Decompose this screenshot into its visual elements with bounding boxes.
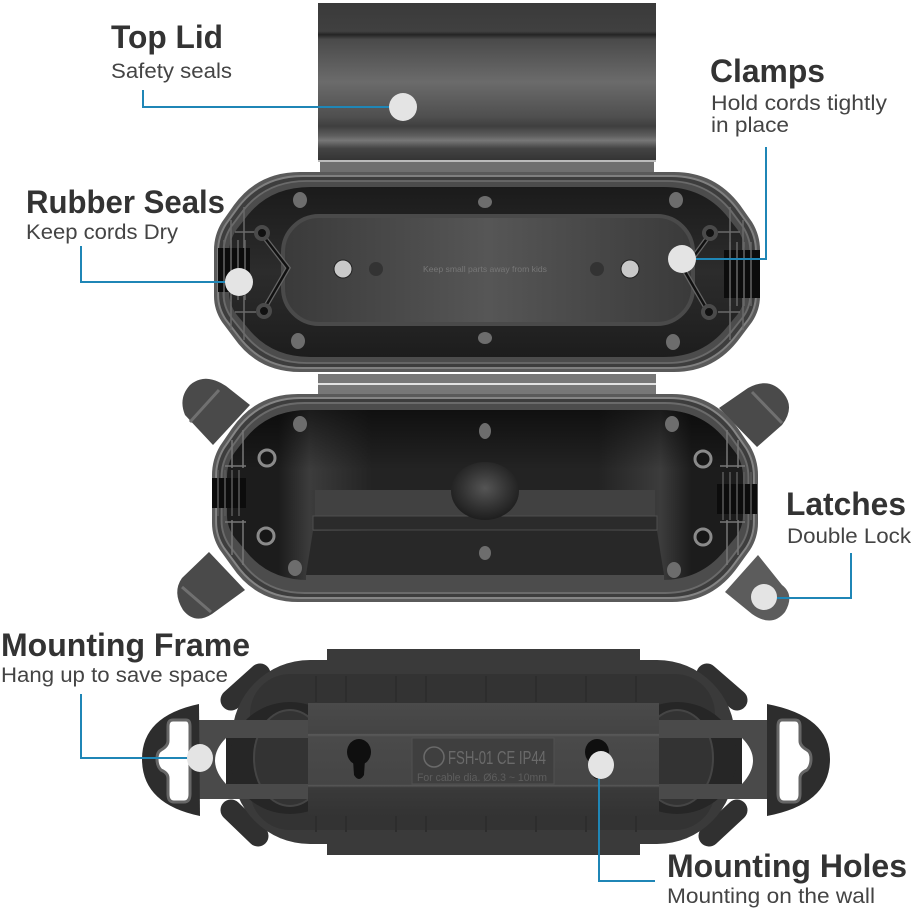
product: upper case interior (214, 172, 760, 372)
clamps (256, 227, 716, 318)
product: open top lid (318, 3, 656, 180)
centre plate (308, 703, 659, 816)
seal housing lines upper (231, 207, 743, 340)
keyhole right (585, 739, 609, 779)
marker: mounting frame (187, 744, 213, 772)
marker: clamps (668, 245, 696, 273)
leader: clamps (694, 147, 766, 259)
leader: latches (776, 553, 851, 598)
callout: mounting holes (667, 848, 907, 908)
callout: rubber seals: Keep cords Dry (26, 221, 179, 244)
callout: clamps (710, 53, 888, 137)
marker: mounting holes (588, 751, 614, 779)
corner latches (231, 674, 737, 836)
callout: rubber seals: Rubber Seals (26, 184, 225, 220)
seal housing lines lower (225, 430, 745, 565)
product: lower case interior (212, 394, 758, 602)
rubber seals lower (212, 470, 757, 520)
drum ends (226, 738, 256, 784)
mounting bosses (258, 450, 711, 545)
marker: latches (751, 584, 777, 610)
marker: rubber seals (225, 268, 253, 296)
rubber seals upper (218, 240, 760, 306)
callout: clamps: in place (711, 114, 789, 137)
hinge strip (318, 374, 656, 398)
callout: latches: Latches (786, 486, 906, 522)
rating label (412, 738, 554, 784)
centre dome (451, 462, 519, 520)
callout: mounting holes: Mounting Holes (667, 848, 907, 884)
callout: top lid: Top Lid (111, 19, 223, 55)
marker: top lid (389, 93, 417, 121)
rating label: For cable dia. Ø6.3 ~ 10mm (417, 772, 547, 784)
callout: clamps: Clamps (710, 53, 825, 89)
keyhole left (347, 739, 371, 779)
leader: rubber seals (81, 246, 226, 282)
rating label: FSH-01 CE IP44 (448, 748, 546, 768)
left handle (142, 704, 200, 816)
frame rails (197, 720, 770, 799)
callout: top lid (111, 19, 232, 83)
latches on lower case (177, 379, 789, 621)
callout: top lid: Safety seals (111, 60, 232, 83)
screws and pegs (334, 260, 639, 278)
callout: mounting frame: Mounting Frame (1, 627, 250, 663)
callout: mounting frame: Hang up to save space (1, 664, 228, 687)
callout: mounting holes: Mounting on the wall (667, 885, 875, 908)
callout: mounting frame (1, 627, 250, 687)
moulded text: Keep small parts away from kids (423, 264, 547, 274)
callout: rubber seals (26, 184, 225, 244)
callout: clamps: Hold cords tightly (711, 92, 888, 115)
callout: latches: Double Lock (787, 525, 912, 548)
leader: top lid (143, 90, 390, 107)
right handle (767, 704, 830, 816)
leader: mounting holes (599, 778, 655, 881)
leader: mounting frame (81, 694, 188, 758)
ribs (316, 676, 636, 832)
product: mounting frame rear view (142, 649, 830, 855)
callout: latches (786, 486, 912, 548)
